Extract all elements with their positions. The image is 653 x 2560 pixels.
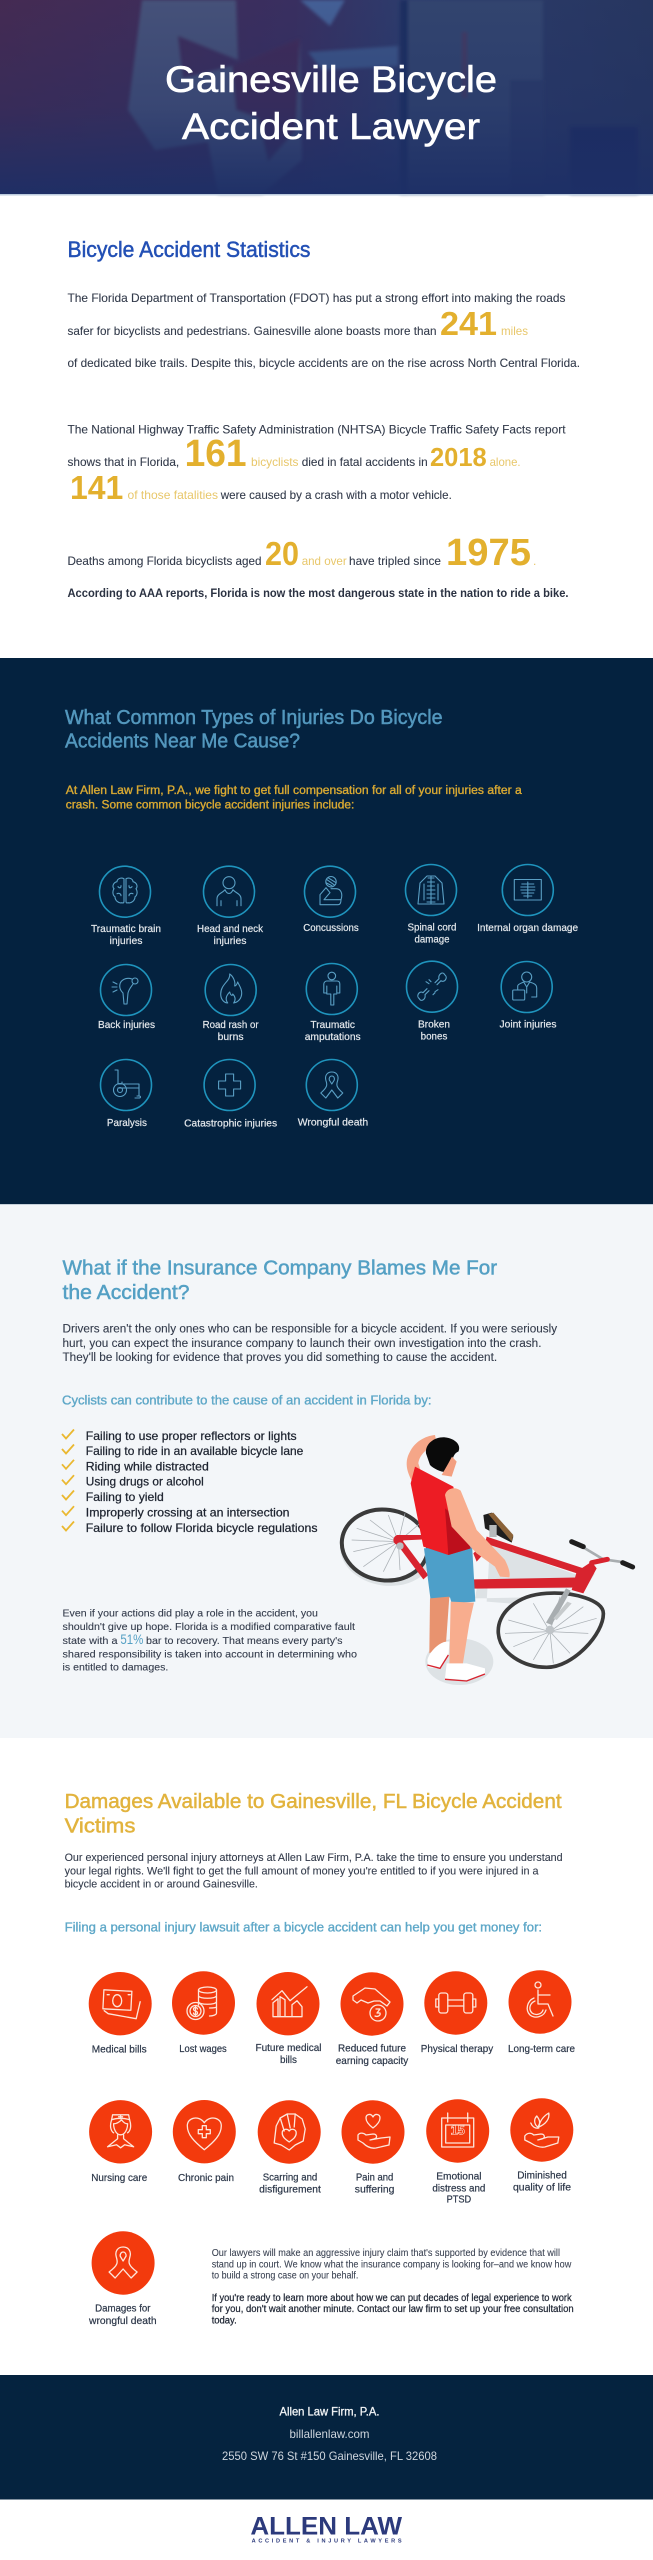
- item: traumatic amputations: amputations: [305, 1031, 361, 1043]
- item: pain and suffering: suffering: [355, 2183, 395, 2195]
- icon: banknotes: [103, 1990, 140, 2019]
- text block: comparative fault: is entitled to damages.: [62, 1661, 168, 1673]
- text block: damages intro: your legal rights. We'll fight to get the full amount of money you're entitled to if you were injured in a: [65, 1865, 539, 1877]
- heading: damages available: Damages Available to Gainesville, FL Bicycle Accident: [65, 1790, 562, 1813]
- text block: deaths paragraph: .: [533, 554, 536, 568]
- text block: call to action: today.: [212, 2316, 237, 2327]
- item: internal organ damage: Internal organ damage: [477, 922, 578, 934]
- item: emotional distress and PTSD: PTSD: [447, 2194, 472, 2206]
- text block: aggressive claim: to build a strong case on your behalf.: [212, 2271, 358, 2282]
- icon: brain: [113, 878, 137, 903]
- item: spinal cord damage: Spinal cord: [408, 922, 457, 934]
- item: pain and suffering: [342, 2100, 404, 2195]
- icon: ribbon: [109, 2247, 137, 2278]
- frame: [393, 1535, 597, 1593]
- list: cyclist contributing factors: Riding while distracted: [86, 1459, 209, 1473]
- text block: drivers paragraph: [62, 1323, 557, 1364]
- list: cyclist contributing factors: Failing to use proper reflectors or lights: [86, 1429, 297, 1443]
- text block: call to action: If you're ready to learn more about how we can put decades of legal experience to work: [212, 2293, 573, 2304]
- text block: NHTSA paragraph: 2018: [430, 442, 487, 472]
- text block: comparative fault: 51%: [120, 1631, 143, 1647]
- text block: NHTSA paragraph: 141: [70, 469, 123, 506]
- text block: injuries intro: At Allen Law Firm, P.A., we fight to get full compensation for all of your injuries after a: [66, 785, 522, 797]
- logo: Allen Law: ALLEN LAW: [250, 2512, 402, 2540]
- icon: heart above hand: [358, 2114, 390, 2148]
- handlebars: [572, 1542, 633, 1567]
- text block: deaths paragraph: According to AAA reports, Florida is now the most dangerous state in the nation to ride a bike.: [68, 586, 568, 600]
- icon: wheelchair: [114, 1070, 140, 1098]
- text block: aggressive claim: Our lawyers will make an aggressive injury claim that's supported by evidence that will: [212, 2248, 560, 2259]
- list: cyclist contributing factors: [62, 1429, 318, 1535]
- item: traumatic amputations: [305, 964, 361, 1043]
- item: wrongful death: [298, 1060, 368, 1128]
- text block: FDOT paragraph: The Florida Department of Transportation (FDOT) has put a strong effort into making the roads: [68, 291, 566, 305]
- item: reduced future earning capacity: Reduced future: [338, 2043, 406, 2055]
- illustration: cyclist looking at crashed bicycle: [336, 1435, 633, 1685]
- text block: FDOT paragraph: safer for bicyclists and pedestrians. Gainesville alone boasts more than: [68, 324, 436, 338]
- text block: FDOT paragraph: 241: [440, 305, 497, 342]
- item: road rash or burns: burns: [218, 1031, 244, 1043]
- heading: common injuries: [65, 707, 442, 753]
- heading: common injuries: What Common Types of Injuries Do Bicycle: [65, 707, 442, 729]
- heading: insurance blame: [62, 1257, 497, 1304]
- icon: heart with cross: [187, 2118, 221, 2150]
- text block: deaths paragraph: Deaths among Florida bicyclists aged: [68, 554, 262, 568]
- subheading: filing a lawsuit: Filing a personal injury lawsuit after a bicycle accident can help you get money for:: [65, 1921, 542, 1935]
- text block: NHTSA paragraph: died in fatal accidents in: [302, 455, 428, 469]
- item: pain and suffering: Pain and: [356, 2171, 393, 2183]
- list: cyclist contributing factors: Failure to follow Florida bicycle regulations: [86, 1521, 318, 1535]
- item: broken bones: Broken: [418, 1019, 450, 1031]
- text block: comparative fault: [62, 1608, 357, 1673]
- item: concussions: [303, 866, 359, 934]
- icon: spine: [418, 876, 444, 904]
- title: [165, 59, 497, 147]
- text block: drivers paragraph: Drivers aren't the only ones who can be responsible for a bicycle accident. If you were seriously: [62, 1323, 557, 1335]
- icon: head bandage and sling: [320, 876, 342, 905]
- item: back injuries: [98, 964, 155, 1031]
- item: reduced future earning capacity: earning capacity: [336, 2055, 409, 2067]
- rear wheel: [337, 1504, 433, 1586]
- text block: call to action: [212, 2293, 574, 2327]
- icon: calendar: [442, 2113, 474, 2147]
- text block: NHTSA paragraph: shows that in Florida,: [68, 455, 179, 469]
- icon: doctor with clipboard: [513, 972, 537, 1000]
- item: back injuries: Back injuries: [98, 1019, 155, 1031]
- icon: cross: [219, 1074, 241, 1096]
- item: reduced future earning capacity: [336, 1972, 409, 2067]
- icon: hand with coin: [353, 1988, 390, 2021]
- item: medical bills: Medical bills: [92, 2043, 147, 2055]
- item: emotional distress and PTSD: 15: [450, 2122, 465, 2138]
- heading: damages available: Victims: [65, 1814, 135, 1837]
- icon: dumbbell: [436, 1993, 476, 2013]
- panel: header banner: [0, 0, 653, 196]
- item: future medical bills: [256, 1972, 322, 2066]
- front wheel: [498, 1593, 603, 1667]
- text block: comparative fault: shouldn't give up hope. Florida is a modified comparative fault: [62, 1621, 355, 1633]
- text: address: 2550 SW 76 St #150 Gainesville, FL 32608: [222, 2449, 437, 2463]
- text block: comparative fault: bar to recovery. That means every party's: [146, 1635, 342, 1647]
- item: broken bones: bones: [421, 1031, 447, 1043]
- text block: FDOT paragraph: miles: [501, 324, 528, 338]
- item: traumatic brain injuries: Traumatic brain: [91, 923, 161, 935]
- icon: nurse: [108, 2115, 134, 2148]
- item: scarring and disfigurement: [258, 2100, 321, 2195]
- item: long-term care: Long-term care: [508, 2043, 575, 2055]
- item: lost wages: Lost wages: [179, 2043, 227, 2055]
- heading: damages available: [65, 1790, 562, 1837]
- text block: FDOT paragraph: [68, 291, 580, 370]
- item: traumatic brain injuries: [91, 866, 161, 947]
- item: traumatic brain injuries: injuries: [110, 935, 142, 947]
- icon: plant in hand: [525, 2113, 559, 2147]
- item: emotional distress and PTSD: Emotional: [436, 2170, 482, 2182]
- item: nursing care: Nursing care: [91, 2172, 147, 2184]
- text block: comparative fault: Even if your actions did play a role in the accident, you: [62, 1608, 318, 1620]
- title: Accident Lawyer: [182, 106, 480, 147]
- text block: deaths paragraph: 20: [265, 535, 299, 572]
- saddle: [483, 1513, 513, 1543]
- text block: NHTSA paragraph: of those fatalities: [128, 488, 218, 502]
- item: head and neck injuries: Head and neck: [197, 923, 264, 935]
- panel: insurance blame: [0, 1205, 653, 1738]
- text block: comparative fault: shared responsibility is taken into account in determining who: [62, 1648, 357, 1660]
- text block: damages intro: Our experienced personal injury attorneys at Allen Law Firm, P.A. take the time to ensure you understand: [65, 1852, 563, 1864]
- text block: damages intro: [65, 1852, 563, 1890]
- item: scarring and disfigurement: disfigurement: [259, 2183, 321, 2195]
- text block: NHTSA paragraph: 161: [185, 433, 247, 475]
- text block: injuries intro: [66, 785, 522, 811]
- fork: [546, 1588, 571, 1625]
- heading: common injuries: Accidents Near Me Cause?: [65, 731, 300, 753]
- item: diminished quality of life: Diminished: [517, 2170, 567, 2182]
- text block: damages intro: bicycle accident in or around Gainesville.: [65, 1878, 258, 1890]
- item: damages for wrongful death: wrongful death: [88, 2315, 157, 2327]
- text block: deaths paragraph: and over: [302, 554, 347, 568]
- item: catastrophic injuries: Catastrophic injuries: [184, 1118, 277, 1130]
- item: future medical bills: Future medical: [256, 2042, 322, 2054]
- text block: aggressive claim: [212, 2248, 572, 2282]
- icon: x-ray: [514, 880, 541, 900]
- item: road rash or burns: [203, 964, 259, 1043]
- text block: call to action: for you, don't wait another minute. Contact our law firm to set up your free consultation: [212, 2304, 574, 2315]
- item: emotional distress and PTSD: distress and: [432, 2182, 486, 2194]
- heading: bicycle accident statistics: Bicycle Accident Statistics: [68, 237, 310, 262]
- item: joint injuries: Joint injuries: [500, 1019, 556, 1031]
- item: wrongful death: Wrongful death: [298, 1116, 368, 1128]
- list: cyclist contributing factors: Improperly crossing at an intersection: [86, 1506, 290, 1520]
- text block: deaths paragraph: have tripled since: [349, 554, 441, 568]
- icon: bone: [418, 973, 446, 1000]
- icon: coins: [187, 1987, 216, 2020]
- item: head and neck injuries: [197, 866, 264, 947]
- text: firm name: Allen Law Firm, P.A.: [280, 2405, 380, 2419]
- text block: comparative fault: state with a: [62, 1635, 118, 1647]
- text block: injuries intro: crash. Some common bicycle accident injuries include:: [66, 799, 354, 811]
- item: long-term care: [508, 1970, 575, 2055]
- item: head and neck injuries: injuries: [214, 935, 246, 947]
- icon: back pain: [112, 978, 138, 1004]
- item: internal organ damage: [477, 864, 578, 934]
- icon: amputee figure: [324, 972, 340, 1005]
- list: cyclist contributing factors: Using drugs or alcohol: [86, 1475, 204, 1489]
- item: medical bills: [89, 1972, 152, 2055]
- item: paralysis: [100, 1060, 152, 1129]
- text block: deaths paragraph: [68, 532, 568, 600]
- text block: FDOT paragraph: of dedicated bike trails. Despite this, bicycle accidents are on the rise across North Central Florida.: [68, 356, 580, 370]
- text block: NHTSA paragraph: were caused by a crash with a motor vehicle.: [220, 488, 452, 502]
- list: cyclist contributing factors: Failing to yield: [86, 1490, 164, 1504]
- item: spinal cord damage: [406, 864, 457, 946]
- item: damages for wrongful death: [88, 2231, 157, 2327]
- list: cyclist contributing factors: Failing to ride in an available bicycle lane: [86, 1444, 304, 1458]
- shadows: [336, 1510, 595, 1685]
- text block: drivers paragraph: They'll be looking for evidence that proves you did something to cause the accident.: [62, 1352, 497, 1364]
- text block: NHTSA paragraph: The National Highway Traffic Safety Administration (NHTSA) Bicycle Traffic Safety Facts report: [68, 422, 566, 436]
- item: chronic pain: Chronic pain: [178, 2172, 234, 2184]
- heading: insurance blame: What if the Insurance Company Blames Me For: [62, 1257, 497, 1280]
- item: damages for wrongful death: Damages for: [95, 2303, 151, 2315]
- item: emotional distress and PTSD: [426, 2099, 489, 2206]
- icon: flame: [221, 974, 242, 1003]
- item: physical therapy: Physical therapy: [421, 2043, 494, 2055]
- item: chronic pain: [173, 2100, 236, 2184]
- item: scarring and disfigurement: Scarring and: [263, 2171, 317, 2183]
- text block: deaths paragraph: 1975: [446, 532, 531, 574]
- heading: insurance blame: the Accident?: [62, 1281, 190, 1304]
- item: spinal cord damage: damage: [414, 934, 450, 946]
- subheading: cyclists can contribute: Cyclists can contribute to the cause of an accident in Florida by:: [62, 1394, 431, 1408]
- text block: aggressive claim: stand up in court. We know what the insurance company is looking for–and we know how: [212, 2260, 572, 2271]
- panel: common injuries: [0, 658, 653, 1205]
- item: diminished quality of life: quality of life: [513, 2182, 571, 2194]
- item: physical therapy: [421, 1971, 494, 2055]
- text block: drivers paragraph: hurt, you can expect the insurance company to launch their own investigation into the crash.: [62, 1338, 542, 1350]
- item: traumatic amputations: Traumatic: [310, 1019, 355, 1031]
- title: Gainesville Bicycle: [165, 59, 497, 100]
- text block: NHTSA paragraph: alone.: [490, 455, 521, 469]
- item: future medical bills: bills: [280, 2054, 297, 2066]
- item: catastrophic injuries: [184, 1060, 277, 1130]
- item: nursing care: [89, 2100, 152, 2184]
- icon: hands and heart: [274, 2114, 305, 2150]
- item: broken bones: [406, 961, 458, 1043]
- icon: wheelchair symbol: [527, 1982, 553, 2017]
- text block: NHTSA paragraph: bicyclists: [251, 455, 298, 469]
- item: paralysis: Paralysis: [107, 1117, 147, 1129]
- panel: footer contact: [0, 2375, 653, 2500]
- item: diminished quality of life: [510, 2098, 573, 2194]
- icon: head and neck: [217, 877, 241, 906]
- item: lost wages: [172, 1971, 235, 2055]
- logo: Allen Law: ACCIDENT & INJURY LAWYERS: [252, 2539, 402, 2545]
- item: road rash or burns: Road rash or: [203, 1019, 259, 1031]
- text block: NHTSA paragraph: [68, 422, 566, 506]
- person: [407, 1435, 510, 1681]
- item: joint injuries: [500, 962, 556, 1031]
- icon: rising chart: [272, 1987, 307, 2017]
- text: website: billallenlaw.com: [290, 2427, 370, 2441]
- item: concussions: Concussions: [303, 922, 359, 934]
- icon: ribbon: [321, 1072, 343, 1098]
